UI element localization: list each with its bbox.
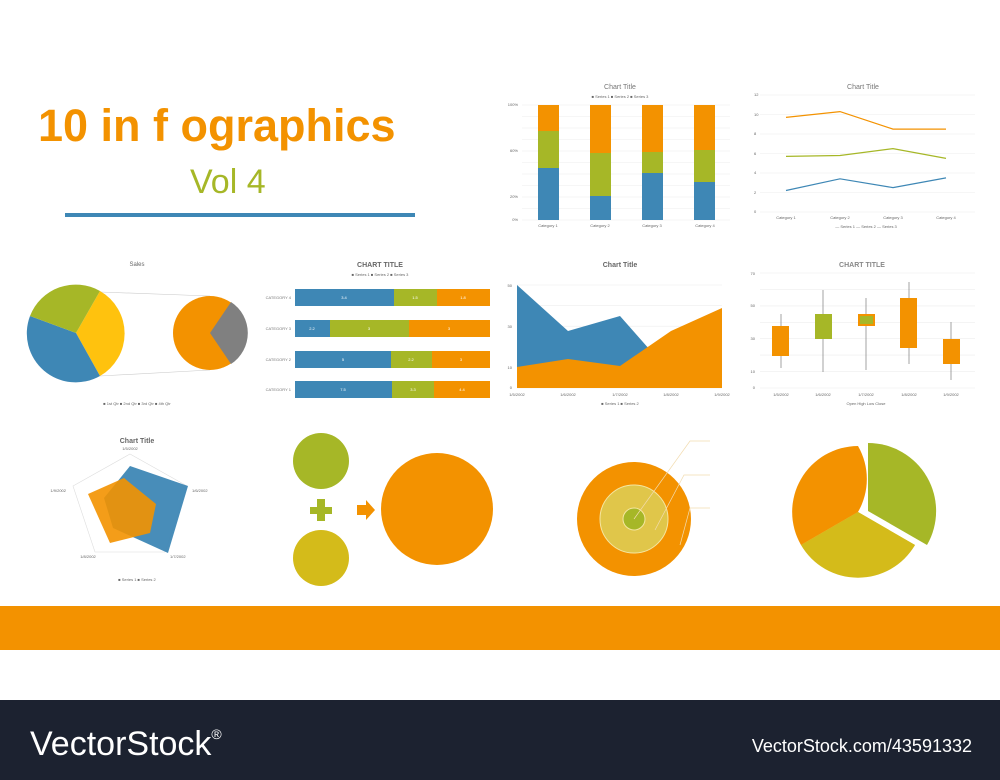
title: 10 in f ographics <box>38 100 396 151</box>
chart: radar <box>50 438 208 582</box>
chart: stacked 100% column: Chart Title <box>604 84 636 91</box>
chart: candlestick: 10 <box>751 369 756 374</box>
chart: horizontal stacked bar: 2.2 <box>309 326 316 331</box>
chart: horizontal stacked bar: 4.4 <box>459 387 466 392</box>
chart: candlestick: 1/8/2002 <box>901 392 918 397</box>
chart: radar: Chart Title <box>120 438 154 445</box>
footer <box>0 700 1000 780</box>
chart: stacked 100% column <box>508 84 730 228</box>
chart: candlestick: CHART TITLE <box>839 262 885 269</box>
chart: candlestick: 0 <box>753 385 756 390</box>
diagram: target <box>577 441 710 576</box>
title: Vol 4 <box>190 163 266 201</box>
chart: horizontal stacked bar: 2.2 <box>408 357 415 362</box>
chart: radar: ■ Series 1 ■ Series 2 <box>118 577 157 582</box>
chart: radar: 1/7/2002 <box>170 554 186 559</box>
chart: horizontal stacked bar: 7.5 <box>340 387 347 392</box>
chart: candlestick: Open High Low Close <box>847 401 886 406</box>
chart: horizontal stacked bar: 5 <box>342 357 345 362</box>
chart: stacked 100% column: Category 2 <box>590 223 611 228</box>
chart: area: 30 <box>508 324 513 329</box>
chart: radar: 1/8/2002 <box>80 554 97 559</box>
chart: pie of pie <box>27 262 248 406</box>
chart: candlestick <box>751 262 975 406</box>
chart: line: Category 1 <box>776 215 797 220</box>
chart: line: 6 <box>754 151 757 156</box>
chart: horizontal stacked bar: CATEGORY 4 <box>266 295 292 300</box>
footer: VectorStock <box>30 725 211 763</box>
chart: candlestick: 70 <box>751 271 756 276</box>
chart: area: 0 <box>510 385 513 390</box>
chart: horizontal stacked bar: 1.8 <box>460 295 467 300</box>
chart: line: Category 4 <box>936 215 957 220</box>
chart: area <box>508 262 731 406</box>
chart: area: 10 <box>508 365 513 370</box>
chart: candlestick: 1/5/2002 <box>773 392 790 397</box>
diagram: circles addition <box>293 433 493 586</box>
chart: radar: 1/9/2002 <box>50 488 67 493</box>
chart: candlestick: 50 <box>751 303 756 308</box>
chart: stacked 100% column: 0% <box>512 217 518 222</box>
chart: horizontal stacked bar: 3.3 <box>410 387 417 392</box>
chart: radar: 1/6/2002 <box>192 488 208 493</box>
chart: candlestick: 1/7/2002 <box>858 392 875 397</box>
chart: line: 4 <box>754 170 757 175</box>
chart: horizontal stacked bar: CATEGORY 1 <box>266 387 292 392</box>
chart: candlestick: 1/9/2002 <box>943 392 960 397</box>
chart: line: Category 3 <box>883 215 904 220</box>
chart: stacked 100% column: Category 4 <box>695 223 716 228</box>
chart: stacked 100% column: 20% <box>510 194 518 199</box>
chart: area: ■ Series 1 ■ Series 2 <box>601 401 640 406</box>
chart: stacked 100% column: 100% <box>508 102 518 107</box>
orange band <box>0 606 1000 650</box>
chart: horizontal stacked bar: 3 <box>368 326 371 331</box>
chart: area: 1/5/2002 <box>509 392 526 397</box>
chart: horizontal stacked bar: 3 <box>448 326 451 331</box>
footer: ® <box>211 726 222 742</box>
chart: horizontal stacked bar: 3 <box>460 357 463 362</box>
chart: line: Category 2 <box>830 215 851 220</box>
chart: horizontal stacked bar: CATEGORY 3 <box>266 326 292 331</box>
chart: area: 1/7/2002 <box>612 392 629 397</box>
chart: line: — Series 1 — Series 2 — Series 3 <box>835 224 898 229</box>
chart: area: 1/6/2002 <box>560 392 577 397</box>
chart: pie of pie: ■ 1st Qtr ■ 2nd Qtr ■ 3rd Qtr ■ 4th Qtr <box>103 401 171 406</box>
chart: line: 12 <box>754 92 759 97</box>
chart: line: 10 <box>754 112 759 117</box>
chart: radar: 1/5/2002 <box>122 446 139 451</box>
chart: stacked 100% column: 60% <box>510 148 518 153</box>
chart: exploded pie <box>792 443 936 578</box>
chart: stacked 100% column: Category 1 <box>538 223 559 228</box>
title <box>38 100 415 217</box>
footer: VectorStock.com/43591332 <box>752 736 972 756</box>
chart: horizontal stacked bar: 1.5 <box>412 295 419 300</box>
chart: line: Chart Title <box>847 84 879 91</box>
chart: area: 1/9/2002 <box>714 392 731 397</box>
chart: area: 1/8/2002 <box>663 392 680 397</box>
chart: horizontal stacked bar: CATEGORY 2 <box>266 357 292 362</box>
chart: line: 0 <box>754 209 757 214</box>
chart: candlestick: 30 <box>751 336 756 341</box>
chart: area: 50 <box>508 283 513 288</box>
chart: line <box>754 84 975 229</box>
chart: line: 8 <box>754 131 757 136</box>
chart: horizontal stacked bar: ■ Series 1 ■ Series 2 ■ Series 3 <box>352 272 409 277</box>
chart: pie of pie: Sales <box>129 262 145 268</box>
chart: candlestick: 1/6/2002 <box>815 392 832 397</box>
chart: horizontal stacked bar: 3.4 <box>341 295 348 300</box>
chart: line: 2 <box>754 190 757 195</box>
chart: stacked 100% column: Category 3 <box>642 223 663 228</box>
chart: horizontal stacked bar: CHART TITLE <box>357 262 403 269</box>
chart: horizontal stacked bar <box>266 262 490 398</box>
chart: stacked 100% column: ■ Series 1 ■ Series 2 ■ Series 3 <box>592 94 649 99</box>
chart: area: Chart Title <box>603 262 637 269</box>
